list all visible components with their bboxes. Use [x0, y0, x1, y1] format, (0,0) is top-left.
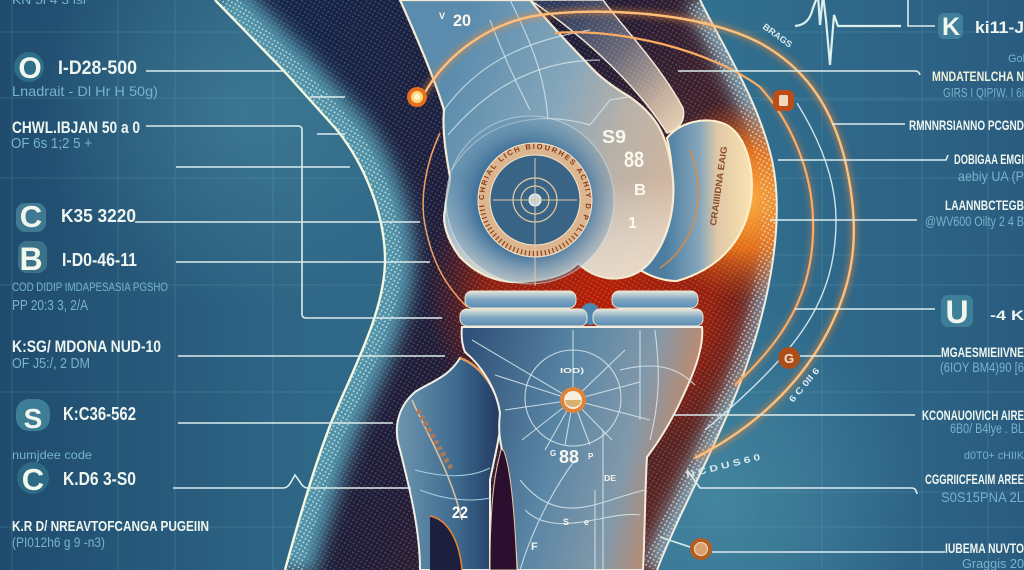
notch between tibia and fibula — [490, 450, 517, 570]
left labels: (PI012h6 g 9 -n3) — [12, 534, 105, 550]
badge: S — [16, 399, 50, 434]
fibula — [397, 358, 500, 570]
femur target disc — [446, 116, 614, 286]
tibia numerals: G — [550, 449, 556, 458]
marker: lower right — [690, 538, 712, 560]
left labels: K:C36-562 — [63, 404, 136, 424]
right leader lines — [660, 0, 948, 552]
marker: right middle — [778, 347, 800, 369]
tibia numerals: e — [584, 517, 589, 527]
left labels: Lnadrait - Dl Hr H 50g) — [12, 83, 158, 99]
left labels: K35 3220 — [61, 206, 136, 226]
marker: tibia centre — [560, 387, 586, 413]
ECG trace — [795, 0, 901, 65]
left labels: COD DIDIP IMDAPESASIA PGSHO — [12, 280, 168, 294]
left labels: OF 6s 1;2 5 + — [11, 135, 92, 152]
badge: U: U — [945, 294, 969, 330]
left labels — [11, 0, 209, 550]
badge: C lower: C — [22, 462, 44, 497]
femur — [398, 0, 675, 286]
tibia numerals: DE — [604, 474, 617, 483]
tibia numerals: S — [563, 517, 569, 527]
femur numerals — [439, 11, 646, 232]
femur curved contour lines — [444, 0, 628, 170]
femur target disc: CHRIAL LICH BIOURHES ACHIY D P ILIIIIIIIIIIIIIIIIIIIIIIIIIIIIIIII — [478, 144, 592, 256]
badge: B: B — [19, 241, 43, 277]
tibia — [462, 327, 702, 570]
left labels: numjdee code — [12, 448, 92, 462]
badge: O: O — [18, 52, 42, 85]
tibia numerals: 88 — [559, 447, 579, 467]
left labels: K.R D/ NREAVTOFCANGA PUGEIIN — [12, 518, 209, 535]
leg silhouette — [214, 0, 778, 570]
femur numerals: 1 — [628, 215, 637, 232]
femur numerals: S9 — [602, 127, 626, 147]
femur numerals: 20 — [453, 11, 471, 30]
femur lateral condyle: CRAIIIIDNA EAIG — [708, 146, 729, 226]
badge: C lower — [17, 462, 49, 497]
knee label rotated text: 6 C 0II 6 — [787, 366, 822, 404]
orange arcs — [423, 12, 854, 458]
left labels: CHWL.IBJAN 50 a 0 — [12, 118, 140, 137]
marker: upper right — [773, 90, 794, 111]
badge: S: S — [24, 403, 42, 434]
right labels: d0T0+ cHIIK — [964, 450, 1024, 462]
tibia numerals: IOD) — [560, 368, 584, 375]
tibia numerals — [531, 368, 617, 553]
knee label rotated text — [685, 22, 822, 480]
femur lateral condyle — [640, 120, 752, 281]
left labels: PP 20:3 3, 2/A — [12, 297, 88, 314]
knee label rotated text: BRAGS — [761, 22, 794, 50]
badge: C: C — [20, 199, 42, 234]
femur numerals: 88 — [624, 147, 644, 172]
left labels: OF J5:/, 2 DM — [12, 355, 90, 372]
femur numerals: B — [634, 182, 646, 199]
knee label rotated text: N C D U S 6 0 — [685, 452, 761, 480]
femur numerals: V — [439, 11, 445, 21]
marker: femur — [407, 87, 427, 107]
left labels: I-D0-46-11 — [62, 250, 137, 270]
femur posterior shaft — [530, 0, 684, 133]
right labels: ki11-J — [975, 18, 1024, 37]
left labels: K:SG/ MDONA NUD-10 — [12, 337, 161, 356]
right labels — [909, 18, 1024, 570]
menisci — [460, 291, 703, 326]
left leader lines — [135, 71, 445, 488]
right labels: -4 K — [990, 307, 1024, 323]
left labels: I-D28-500 — [58, 58, 137, 79]
fibula: 22 — [452, 503, 468, 522]
marker: right middle: G — [784, 351, 794, 366]
left labels: K.D6 3-S0 — [63, 469, 136, 489]
tibia numerals: P — [588, 452, 594, 461]
tibia radial lines — [472, 330, 695, 570]
tibia numerals: F — [531, 541, 538, 553]
badge: K: K — [942, 13, 960, 41]
